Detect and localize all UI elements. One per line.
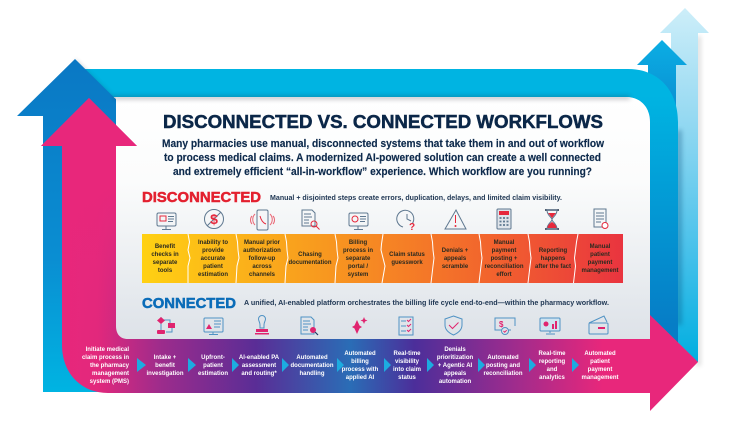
connected flow labels: posting and <box>486 363 520 369</box>
disconnected step bar <box>142 234 623 283</box>
subtitle: disconnected: Manual + disjointed steps create errors, duplication, delays, and limited claim visibility. <box>270 195 562 202</box>
icon: credit cards <box>589 316 608 334</box>
connected flow labels: patient <box>590 359 610 365</box>
icon: clock with question mark: ? <box>409 222 415 233</box>
intro text block <box>162 138 605 178</box>
connected flow labels <box>82 347 619 385</box>
disconnected step bar: Claim status <box>389 252 425 258</box>
connected flow labels: Real-time <box>538 351 566 357</box>
panel: white content panel <box>114 96 650 339</box>
connected flow labels: Denials <box>444 347 466 353</box>
title: DISCONNECTED VS. CONNECTED WORKFLOWS <box>163 112 603 132</box>
connected flow labels: and routing* <box>241 371 277 377</box>
icon: document magnifier <box>302 210 320 230</box>
disconnected step bar: Manual <box>494 240 515 246</box>
disconnected step bar: patient <box>590 252 610 258</box>
connected flow labels: documentation <box>290 363 334 369</box>
icon: clock with question mark <box>397 210 415 233</box>
connected flow labels: management <box>92 371 129 377</box>
icon: no dollar sign <box>204 210 224 228</box>
disconnected step bar: documentation <box>288 260 332 266</box>
disconnected step bar: payment <box>492 248 516 254</box>
connected flow labels: process with <box>342 367 379 373</box>
connected flow labels: into claim <box>393 367 421 373</box>
heading: connected: CONNECTED <box>142 296 236 312</box>
connected flow labels: Automated <box>584 351 616 357</box>
icon: checklist <box>399 317 413 335</box>
icon: stamp <box>255 316 269 334</box>
step labels: Benefit <box>155 244 175 250</box>
disconnected step bar: checks in <box>151 252 179 258</box>
disconnected step bar: Manual prior <box>244 240 281 246</box>
disconnected step bar: separate <box>346 256 371 262</box>
disconnected step bar: system <box>348 272 368 278</box>
arrow: pink connected flow arrow <box>41 98 698 411</box>
connected flow labels: Upfront- <box>201 355 225 361</box>
connected flow labels: management <box>581 375 619 381</box>
connected flow labels: appeals <box>444 371 467 377</box>
connected flow labels: status <box>398 375 416 381</box>
connected flow labels: reporting <box>539 359 565 365</box>
icon: no dollar sign: $ <box>210 211 218 227</box>
connected flow labels: Intake + <box>154 355 177 361</box>
connected flow labels: benefit <box>155 363 175 369</box>
icon: warning triangle <box>445 210 466 229</box>
disconnected step bar: Denials + <box>442 248 469 254</box>
disconnected step bar: Inability to <box>198 240 228 246</box>
disconnected step bar: guesswork <box>391 260 423 266</box>
icon: document search <box>301 317 318 335</box>
icon: receipt with dollar <box>594 209 608 228</box>
connected flow labels: patient <box>203 363 223 369</box>
connected flow labels: Real-time <box>393 351 421 357</box>
connected flow labels: AI-enabled PA <box>239 355 280 361</box>
disconnected step bar: tools <box>158 268 173 274</box>
disconnected step bar: posting + <box>491 256 518 262</box>
arrow: light blue back arrow <box>660 8 709 366</box>
connected flow labels: Automated <box>344 351 376 357</box>
connected flow labels: analytics <box>539 375 566 381</box>
intro text block: Many pharmacies use manual, disconnected systems that take them in and out of workflow <box>162 138 605 150</box>
icon: hourglass <box>545 210 559 229</box>
icon: shield check <box>445 316 462 335</box>
icon: analytics monitor <box>540 318 560 334</box>
heading: disconnected: DISCONNECTED <box>142 190 261 206</box>
disconnected step bar: portal / <box>348 264 368 270</box>
connected flow labels: payment <box>588 367 612 373</box>
disconnected step bar: appeals <box>444 256 467 262</box>
arrow: blue left arrow <box>17 59 135 392</box>
icon: monitor with benefit checks <box>157 213 176 230</box>
icon: workflow chart <box>157 317 175 334</box>
connected flow labels: system (PMS) <box>90 379 129 385</box>
icon: AI sparkles <box>352 317 368 334</box>
connected flow labels: investigation <box>146 371 184 377</box>
disconnected step bar: follow-up <box>249 256 276 262</box>
connected flow labels: estimation <box>198 371 228 377</box>
connected flow labels: Initiate medical <box>86 347 129 353</box>
disconnected step bar: Manual <box>590 244 611 250</box>
arrow: top and right blue band <box>80 69 682 362</box>
connected flow labels: Automated <box>296 355 328 361</box>
disconnected step bar: after the fact <box>535 264 571 270</box>
disconnected step bar: channels <box>249 272 276 278</box>
disconnected step bar: estimation <box>198 272 228 278</box>
disconnected step bar: happens <box>541 256 566 262</box>
disconnected step bar: reconciliation <box>484 264 524 270</box>
disconnected step bar: payment <box>588 260 612 266</box>
arrow: mid blue arrow <box>637 40 687 130</box>
disconnected step bar: Reporting <box>539 248 567 254</box>
icon: monitor with dollar <box>349 213 368 230</box>
connected flow labels: handling <box>300 371 325 377</box>
connected flow labels: automation <box>439 379 471 385</box>
disconnected step bar: provide <box>202 248 224 254</box>
disconnected step bar: scramble <box>442 264 469 270</box>
disconnected step bar: accurate <box>201 256 226 262</box>
connected flow labels: and <box>547 367 558 373</box>
connected flow labels: assessment <box>242 363 276 369</box>
intro text block: and extremely efficient “all-in-workflow” experience. Which workflow are you running? <box>173 166 592 178</box>
connected flow labels: visibility <box>395 359 420 365</box>
connected flow labels: the pharmacy <box>90 363 130 369</box>
connected flow labels: + Agentic AI <box>438 363 473 369</box>
disconnected step bar: across <box>252 264 272 270</box>
disconnected step bar: patient <box>203 264 223 270</box>
icon: payment check <box>495 318 515 334</box>
intro text block: to process medical claims. A modernized AI-powered solution can create a well connected <box>164 152 601 164</box>
disconnected step bar: Billing <box>349 240 367 246</box>
icon: patient monitor <box>204 318 223 334</box>
connected flow labels: Automated <box>487 355 519 361</box>
icon: calculator <box>497 209 511 229</box>
disconnected step bar: management <box>581 268 619 274</box>
disconnected step bar: authorization <box>243 248 281 254</box>
connected flow labels: applied AI <box>346 375 375 381</box>
connected flow labels: prioritization <box>437 355 473 361</box>
flow chevrons <box>137 358 579 372</box>
disconnected step bar: separate <box>153 260 178 266</box>
subtitle: connected: A unified, AI-enabled platform orchestrates the billing life cycle end-to-end—within the pharmacy workflow. <box>244 300 609 307</box>
icon: phone ringing <box>250 210 274 230</box>
disconnected step bar: process in <box>343 248 373 254</box>
step separators <box>188 234 578 283</box>
connected flow labels: claim process in <box>82 355 129 361</box>
disconnected step bar: effort <box>496 272 512 278</box>
connected flow labels: billing <box>351 359 369 365</box>
disconnected step bar: Chasing <box>298 252 322 258</box>
icon: payment check: $ <box>499 320 504 329</box>
connected flow labels: reconciliation <box>483 371 523 377</box>
